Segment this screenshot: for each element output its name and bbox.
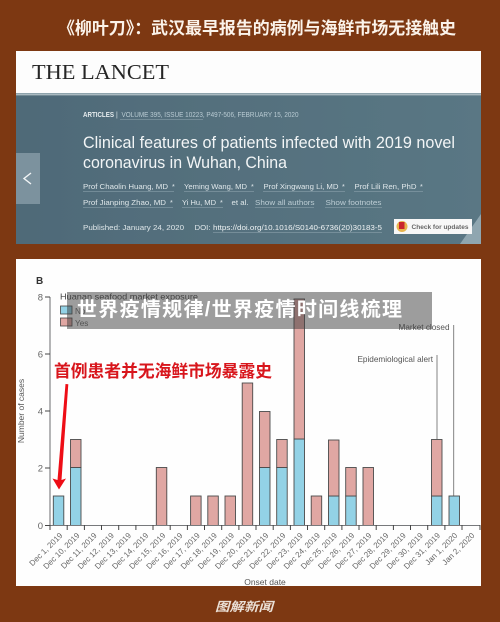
authors: Yeming Wang, MD xyxy=(184,182,247,191)
article headline: Clinical features of patients infected with 2019 novel xyxy=(83,134,455,152)
x axis date labels: Dec 18, 2019 xyxy=(179,531,219,571)
authors: * xyxy=(420,182,423,191)
x axis date labels: Dec 20, 2019 xyxy=(213,531,254,571)
x axis date labels: Dec 30, 2019 xyxy=(385,531,425,571)
lancet logo: THE LANCET xyxy=(32,60,169,84)
authors: et al. xyxy=(232,198,248,207)
authors: Show all authors xyxy=(255,198,315,207)
check for updates badge: Check for updates xyxy=(412,224,469,231)
article headline xyxy=(83,134,455,172)
x axis date labels: Dec 13, 2019 xyxy=(93,531,134,571)
y axis: 6 xyxy=(38,350,43,360)
y axis: 2 xyxy=(38,464,43,474)
x axis date labels: Dec 12, 2019 xyxy=(76,531,116,571)
x axis date labels: Dec 11, 2019 xyxy=(59,531,99,571)
bars xyxy=(53,299,460,526)
x axis date labels: Dec 31, 2019 xyxy=(402,531,443,571)
panel: epidemic curve chart xyxy=(16,259,481,587)
x axis date labels: Jan 1, 2020 xyxy=(423,531,460,567)
publication line: Published: January 24, 2020 xyxy=(83,223,184,232)
publication line xyxy=(83,223,382,232)
previous arrow button xyxy=(16,153,40,204)
panel: lancet article xyxy=(16,51,481,244)
article meta line: VOLUME 395, ISSUE 10223, P497-506, FEBRUARY 15, 2020 xyxy=(122,112,299,119)
authors: * xyxy=(172,182,175,191)
x axis xyxy=(50,525,480,530)
x axis date labels: Dec 14, 2019 xyxy=(110,531,151,571)
legend: No xyxy=(75,307,86,316)
epidemiological alert marker: Epidemiological alert xyxy=(357,355,434,364)
x axis date labels: Dec 16, 2019 xyxy=(145,531,185,571)
check for updates badge xyxy=(394,219,472,234)
legend: Huanan seafood market exposure xyxy=(60,292,198,302)
x axis date labels: Dec 1, 2019 xyxy=(28,531,65,568)
epidemiological alert marker xyxy=(357,355,437,439)
x axis date labels: Jan 2, 2020 xyxy=(440,531,477,567)
y axis: 8 xyxy=(38,292,43,304)
corner triangle xyxy=(460,214,481,244)
publication line: https://doi.org/10.1016/S0140-6736(20)30183-5 xyxy=(213,223,382,232)
link underlines xyxy=(83,120,423,232)
x axis date labels: Dec 10, 2019 xyxy=(42,531,82,571)
x axis date labels: Dec 15, 2019 xyxy=(127,531,168,571)
x axis date labels: Dec 29, 2019 xyxy=(368,531,408,571)
x axis label: Onset date xyxy=(244,577,286,587)
y axis: 4 xyxy=(38,406,43,418)
x axis date labels xyxy=(28,531,477,571)
authors: Yi Hu, MD xyxy=(182,198,216,207)
overlay caption banner: 世界疫情规律/世界疫情时间线梳理 xyxy=(77,297,402,321)
x axis date labels: Dec 17, 2019 xyxy=(162,531,202,571)
footer logo: 图解新闻 xyxy=(215,600,276,614)
x axis date labels: Dec 27, 2019 xyxy=(333,531,374,571)
red annotation: 首例患者并无海鲜市场暴露史 xyxy=(54,361,272,381)
article meta line: ARTICLES xyxy=(83,112,114,119)
authors: Prof Chaolin Huang, MD xyxy=(83,182,168,191)
x axis date labels: Dec 28, 2019 xyxy=(351,531,391,571)
overlay caption banner xyxy=(67,292,432,329)
authors: Prof Xingwang Li, MD xyxy=(264,182,338,191)
article headline: coronavirus in Wuhan, China xyxy=(83,154,288,172)
x axis date labels: Dec 19, 2019 xyxy=(196,531,237,571)
authors: Prof Jianping Zhao, MD xyxy=(83,198,166,207)
x axis date labels: Dec 23, 2019 xyxy=(265,531,305,571)
market closed marker: Market closed xyxy=(399,323,450,332)
x axis date labels: Dec 22, 2019 xyxy=(248,531,288,571)
article meta line: | xyxy=(116,112,118,119)
authors: * xyxy=(220,198,223,207)
authors: * xyxy=(170,198,173,207)
x axis date labels: Dec 26, 2019 xyxy=(316,531,357,571)
publication line: DOI: xyxy=(194,223,210,232)
x axis date labels: Dec 24, 2019 xyxy=(282,531,322,571)
x axis date labels: Dec 25, 2019 xyxy=(299,531,340,571)
legend xyxy=(60,292,198,328)
authors: Show footnotes xyxy=(326,198,382,207)
red arrow xyxy=(52,384,68,490)
legend: Yes xyxy=(75,319,88,328)
authors: * xyxy=(251,182,254,191)
authors: * xyxy=(342,182,345,191)
title: 《柳叶刀》：武汉最早报告的病例与海鲜市场无接触史 xyxy=(58,18,456,38)
y axis xyxy=(38,292,50,532)
y axis: 0 xyxy=(38,521,43,532)
authors: Prof Lili Ren, PhD xyxy=(354,182,416,191)
y axis label: Number of cases xyxy=(16,379,26,443)
panel letter B: B xyxy=(36,276,43,287)
authors xyxy=(83,182,423,207)
x axis date labels: Dec 21, 2019 xyxy=(230,531,271,571)
